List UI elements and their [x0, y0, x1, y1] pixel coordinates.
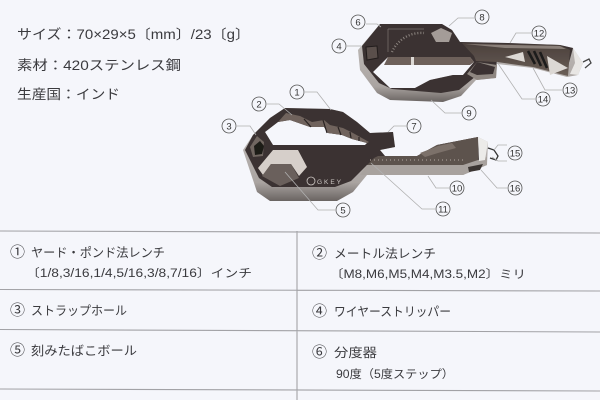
table cell 2: ② — [312, 245, 327, 262]
table cell 1 — [10, 244, 252, 280]
spec text block — [17, 27, 250, 102]
spec text block: 生産国：インド — [17, 87, 120, 102]
callout numbers: 8 — [479, 12, 485, 24]
leader lines — [237, 18, 562, 210]
callout numbers: 6 — [355, 18, 361, 28]
table cell 4: ワイヤーストリッパー — [334, 305, 451, 319]
logo on key — [307, 177, 342, 186]
table cell 6: ⑥ — [312, 344, 327, 361]
table cell 3: ストラップホール — [31, 304, 127, 318]
spec text block: 素材：420ステンレス鋼 — [17, 58, 181, 73]
logo on key: GKEY — [317, 179, 342, 186]
callout numbers — [222, 10, 577, 217]
callout numbers: 10 — [452, 184, 462, 194]
callout numbers: 9 — [466, 108, 472, 120]
callout numbers: 14 — [538, 94, 548, 106]
table cell 2: 〔M8,M6,M5,M4,M3.5,M2〕ミリ — [330, 268, 526, 281]
spec text block: サイズ：70×29×5〔mm〕/23〔g〕 — [17, 27, 250, 42]
table cell 3: ③ — [10, 302, 25, 319]
table rules — [0, 231, 600, 400]
callout numbers: 16 — [510, 184, 520, 194]
table cell 1: ヤード・ポンド法レンチ — [31, 246, 165, 260]
callout numbers: 11 — [438, 204, 448, 216]
table cell 6: 分度器 — [334, 345, 378, 360]
table cell 6 — [312, 344, 454, 381]
callout numbers: 15 — [510, 148, 520, 160]
callout numbers: 1 — [294, 88, 300, 98]
table cell 1: ① — [10, 244, 25, 261]
upper key: back view — [358, 24, 591, 102]
table cell 2 — [312, 245, 526, 281]
callout numbers: 4 — [336, 42, 342, 52]
lower key: front view — [243, 108, 498, 201]
callout numbers: 5 — [340, 206, 346, 216]
callout numbers: 2 — [256, 100, 262, 110]
callout numbers: 12 — [534, 28, 544, 40]
table cell 6: 90度（5度ステップ） — [336, 368, 454, 381]
table cell 3 — [10, 302, 127, 319]
table cell 2: メートル法レンチ — [334, 247, 436, 261]
table cell 1: 〔1/8,3/16,1/4,5/16,3/8,7/16〕インチ — [26, 267, 252, 280]
table cell 5 — [10, 342, 137, 359]
callout numbers: 3 — [226, 122, 232, 132]
table cell 4: ④ — [312, 303, 327, 320]
table cell 4 — [312, 303, 451, 320]
callout numbers: 13 — [565, 86, 575, 96]
callout numbers: 7 — [411, 122, 417, 132]
table cell 5: 刻みたばこボール — [31, 344, 137, 358]
table cell 5: ⑤ — [10, 342, 25, 359]
